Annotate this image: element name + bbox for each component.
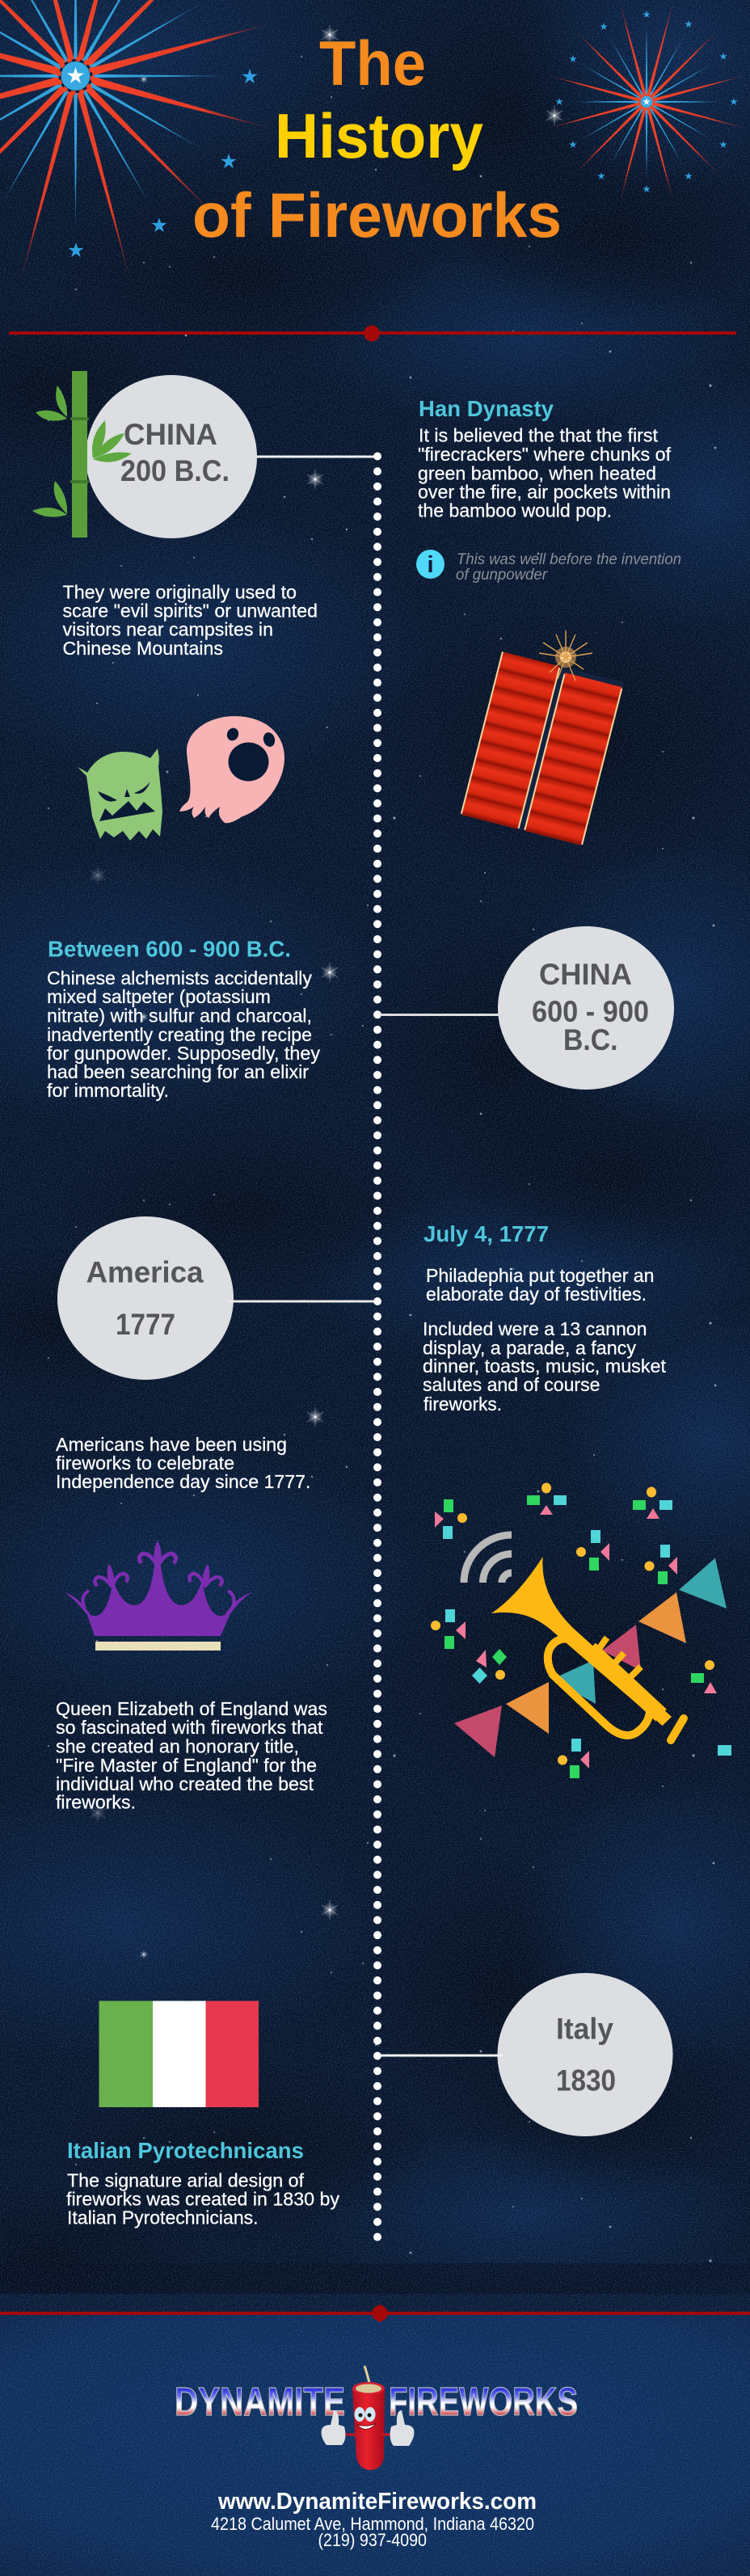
text block: Italian Pyrotechnicans: Italian Pyrotechnicans bbox=[67, 2138, 304, 2163]
text block: July 4, 1777: Philadephia put together an bbox=[426, 1265, 655, 1286]
text block: Italian Pyrotechnicans: fireworks was created in 1830 by bbox=[66, 2189, 340, 2210]
text block: Queen Elizabeth: "Fire Master of England" for the bbox=[56, 1755, 317, 1776]
text block: Between 600 - 900 B.C.: Chinese alchemists accidentally bbox=[47, 968, 312, 989]
icon: firecrackers bbox=[461, 630, 624, 845]
divider: bottom bbox=[0, 2304, 750, 2322]
icon: bamboo bbox=[32, 371, 132, 538]
text block: Independence day: fireworks to celebrate bbox=[56, 1452, 234, 1474]
text block: July 4, 1777: display, a parade, a fancy bbox=[423, 1337, 637, 1358]
icon: small firework burst, top right bbox=[543, 0, 750, 206]
text block: evil spirits: visitors near campsites in bbox=[63, 619, 273, 640]
text block: evil spirits bbox=[63, 582, 318, 659]
icon: info bbox=[416, 550, 445, 579]
text block: Independence day bbox=[56, 1434, 310, 1492]
divider: top bbox=[9, 325, 736, 342]
text block: Han Dynasty: It is believed the that the first bbox=[419, 425, 659, 446]
panel: America 1777 circle: America bbox=[86, 1256, 204, 1288]
text block: Queen Elizabeth: fireworks. bbox=[56, 1791, 136, 1812]
text block: Between 600 - 900 B.C. bbox=[47, 936, 320, 1101]
panel: America 1777 circle: 1777 bbox=[116, 1308, 175, 1341]
text block: Queen Elizabeth: so fascinated with fireworks that bbox=[56, 1717, 323, 1738]
logo: Dynamite Fireworks: FIREWORKS bbox=[389, 2380, 578, 2424]
icon: trumpet with bunting and confetti bbox=[431, 1482, 731, 1778]
icon: info: i bbox=[427, 552, 434, 578]
text block: Between 600 - 900 B.C.: for gunpowder. Supposedly, they bbox=[47, 1043, 320, 1064]
logo: Dynamite Fireworks: DYNAMITE bbox=[175, 2380, 345, 2424]
contact details: www.DynamiteFireworks.com bbox=[217, 2489, 537, 2515]
text block: Han Dynasty: green bamboo, when heated bbox=[418, 462, 656, 483]
panel: China 600 - 900 B.C. circle bbox=[380, 926, 674, 1090]
text block: Independence day: Independence day since 1777. bbox=[56, 1471, 310, 1492]
callout: gunpowder note: of gunpowder bbox=[456, 567, 548, 584]
icon: purple crown bbox=[65, 1541, 252, 1651]
callout: gunpowder note bbox=[416, 550, 681, 584]
panel: China 600 - 900 B.C. circle: B.C. bbox=[563, 1023, 617, 1056]
bunting flags bbox=[454, 1558, 727, 1757]
trumpet bbox=[491, 1557, 684, 1740]
title bbox=[192, 27, 562, 251]
text block: Queen Elizabeth: Queen Elizabeth of England was bbox=[56, 1698, 327, 1719]
text block: Between 600 - 900 B.C.: inadvertently creating the recipe bbox=[47, 1024, 312, 1045]
panel: China 200 B.C. circle: 200 B.C. bbox=[120, 454, 230, 487]
text block: July 4, 1777: salutes and of course bbox=[423, 1374, 600, 1395]
text block: Between 600 - 900 B.C.: had been searching for an elixir bbox=[47, 1061, 309, 1082]
icon: green monster bbox=[78, 748, 162, 841]
panel: China 600 - 900 B.C. circle: CHINA bbox=[539, 958, 632, 991]
text block: July 4, 1777: dinner, toasts, music, musket bbox=[423, 1355, 667, 1377]
contact details: (219) 937-4090 bbox=[318, 2530, 427, 2550]
text block: July 4, 1777 bbox=[423, 1221, 667, 1414]
text block: Between 600 - 900 B.C.: mixed saltpeter (potassium bbox=[47, 986, 271, 1007]
text block: evil spirits: They were originally used to bbox=[63, 582, 297, 603]
text block: Independence day: Americans have been using bbox=[56, 1434, 287, 1455]
panel: Italy 1830 circle: 1830 bbox=[556, 2064, 616, 2097]
confetti bbox=[431, 1482, 731, 1778]
logo: Dynamite Fireworks bbox=[175, 2366, 578, 2470]
text block: July 4, 1777: July 4, 1777 bbox=[423, 1221, 549, 1246]
text block: Han Dynasty: the bamboo would pop. bbox=[418, 500, 612, 521]
contact details bbox=[211, 2489, 537, 2550]
text block: Han Dynasty: over the fire, air pockets within bbox=[418, 482, 671, 503]
text block: Italian Pyrotechnicans: Italian Pyrotechnicians. bbox=[67, 2207, 259, 2228]
icon: Italian flag bbox=[99, 2001, 259, 2107]
icon: dynamite mascot bbox=[322, 2366, 414, 2470]
text block: Queen Elizabeth bbox=[56, 1698, 327, 1812]
text block: Queen Elizabeth: she created an honorary title, bbox=[56, 1736, 299, 1757]
text block: Queen Elizabeth: individual who created the best bbox=[56, 1773, 314, 1794]
text block: Italian Pyrotechnicans bbox=[66, 2138, 340, 2228]
title: of Fireworks bbox=[192, 179, 562, 251]
panel: America 1777 circle bbox=[57, 1216, 374, 1380]
title: History bbox=[275, 100, 483, 171]
text block: July 4, 1777: elaborate day of festivities. bbox=[426, 1284, 647, 1305]
icon: large firework burst, top left bbox=[0, 0, 273, 286]
panel: China 600 - 900 B.C. circle: 600 - 900 bbox=[532, 995, 649, 1028]
contact details: 4218 Calumet Ave, Hammond, Indiana 46320 bbox=[211, 2514, 534, 2534]
panel: China 200 B.C. circle bbox=[32, 371, 374, 538]
text block: July 4, 1777: Included were a 13 cannon bbox=[423, 1318, 647, 1339]
text block: evil spirits: scare "evil spirits" or unwanted bbox=[63, 600, 318, 621]
text block: Han Dynasty bbox=[418, 396, 672, 521]
callout: gunpowder note: This was well before the invention bbox=[457, 551, 681, 568]
text block: evil spirits: Chinese Mountains bbox=[63, 638, 223, 659]
text block: July 4, 1777: fireworks. bbox=[423, 1393, 502, 1414]
timeline: dotted line bbox=[373, 456, 381, 2237]
text block: Han Dynasty: Han Dynasty bbox=[419, 396, 554, 421]
text block: Between 600 - 900 B.C.: for immortality. bbox=[47, 1080, 169, 1101]
text block: Italian Pyrotechnicans: The signature arial design of bbox=[67, 2169, 305, 2190]
icon: pink ghost bbox=[179, 716, 284, 823]
text block: Han Dynasty: "firecrackers" where chunks of bbox=[418, 444, 672, 465]
panel: Italy 1830 circle bbox=[380, 1973, 672, 2136]
panel: Italy 1830 circle: Italy bbox=[556, 2013, 613, 2045]
panel: China 200 B.C. circle: CHINA bbox=[124, 418, 217, 451]
text block: Between 600 - 900 B.C.: Between 600 - 900 B.C. bbox=[48, 936, 291, 962]
title: The bbox=[319, 27, 426, 99]
sound arcs bbox=[464, 1535, 512, 1583]
text block: Between 600 - 900 B.C.: nitrate) with sulfur and charcoal, bbox=[47, 1006, 312, 1027]
